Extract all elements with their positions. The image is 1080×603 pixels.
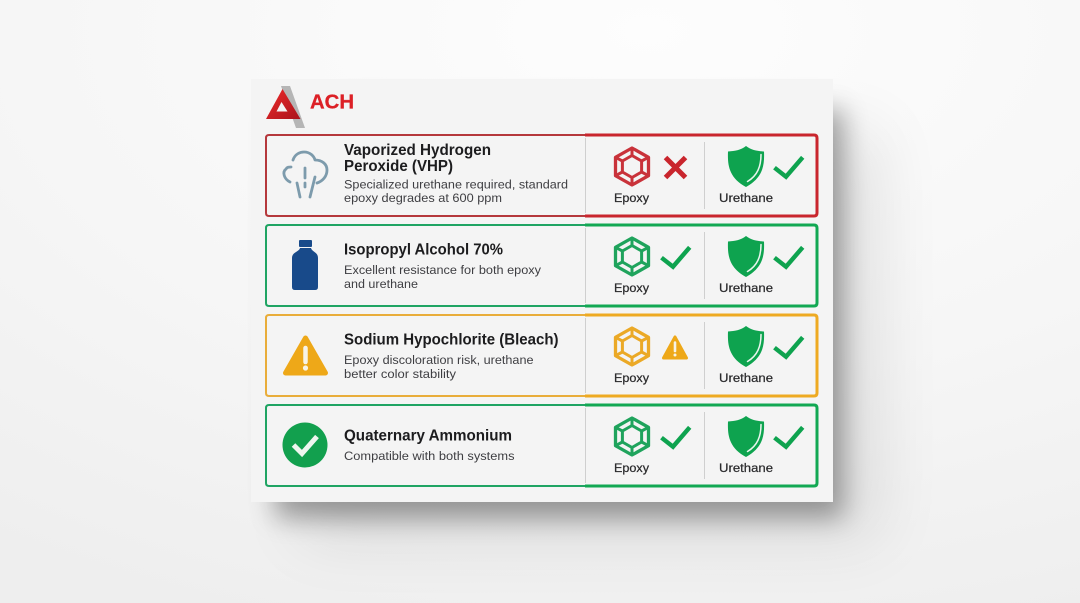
description: Specialized urethane required, standard bbox=[344, 178, 568, 192]
epoxy: caution bbox=[614, 328, 686, 385]
panel: card bbox=[251, 79, 833, 502]
panel: Isopropyl Alcohol bbox=[266, 225, 817, 306]
urethane: pass: Urethane bbox=[719, 371, 773, 385]
icon: logo mark bbox=[266, 86, 305, 128]
heading bbox=[344, 142, 491, 175]
epoxy: caution: Epoxy bbox=[614, 371, 650, 385]
epoxy: pass: Epoxy bbox=[614, 461, 650, 475]
epoxy: pass bbox=[614, 238, 690, 295]
urethane: pass bbox=[719, 326, 803, 385]
logo: ACH bbox=[266, 86, 354, 128]
icon: bottle bbox=[292, 240, 318, 290]
urethane: pass bbox=[719, 416, 803, 475]
description: Excellent resistance for both epoxy bbox=[344, 263, 542, 277]
description: Compatible with both systems bbox=[344, 449, 514, 463]
description: better color stability bbox=[344, 367, 457, 381]
icon: small warning bbox=[664, 337, 686, 358]
heading: Vaporized Hydrogen bbox=[344, 142, 491, 159]
icon: green check circle bbox=[282, 422, 328, 468]
urethane: pass bbox=[719, 146, 803, 205]
heading: Sodium Hypochlorite (Bleach) bbox=[344, 332, 558, 348]
panel: Sodium Hypochlorite bbox=[266, 315, 817, 396]
icon: warning triangle bbox=[286, 338, 326, 373]
description bbox=[344, 353, 534, 381]
description: epoxy degrades at 600 ppm bbox=[344, 191, 502, 205]
description: and urethane bbox=[344, 277, 418, 291]
urethane: pass: Urethane bbox=[719, 281, 773, 295]
heading: Quaternary Ammonium bbox=[344, 428, 512, 444]
urethane: pass: Urethane bbox=[719, 461, 773, 475]
epoxy: pass bbox=[614, 418, 690, 475]
urethane: pass bbox=[719, 236, 803, 295]
epoxy: pass: Epoxy bbox=[614, 281, 650, 295]
heading: Peroxide (VHP) bbox=[344, 158, 453, 175]
urethane: pass: Urethane bbox=[719, 191, 773, 205]
card shadow bbox=[275, 110, 880, 540]
panel: Quaternary Ammonium bbox=[266, 405, 817, 486]
panel: Vaporized Hydrogen Peroxide bbox=[266, 135, 817, 216]
description bbox=[344, 178, 568, 205]
description bbox=[344, 263, 542, 291]
icon: vapor cloud bbox=[284, 152, 327, 197]
logo text: ACH bbox=[310, 92, 354, 114]
heading: Isopropyl Alcohol 70% bbox=[344, 242, 503, 258]
epoxy: fail bbox=[614, 148, 686, 205]
description: Epoxy discoloration risk, urethane bbox=[344, 353, 534, 367]
epoxy: fail: Epoxy bbox=[614, 191, 650, 205]
